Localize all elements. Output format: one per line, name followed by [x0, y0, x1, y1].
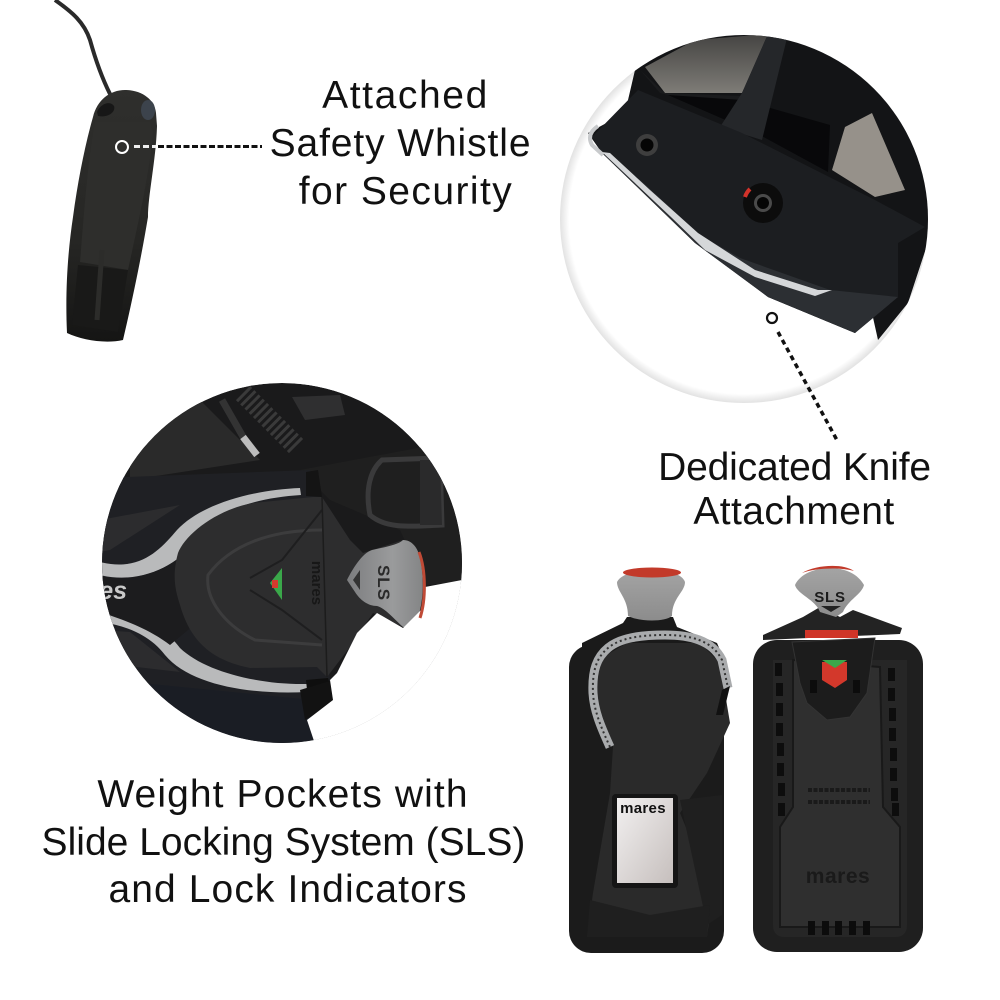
heading: weight pockets: and Lock Indicators	[108, 868, 468, 911]
side slots	[775, 663, 899, 816]
heading: weight pockets: Slide Locking System (SLS)	[42, 821, 525, 864]
dotted leader: knife	[778, 332, 838, 442]
small print	[808, 790, 870, 802]
panel: weight pocket front	[569, 568, 730, 953]
dotted leader: whistle	[134, 145, 262, 148]
panel: weight pocket back	[753, 566, 923, 952]
heading: whistle: Attached	[322, 74, 489, 117]
logo: mares belt: mares	[53, 577, 127, 605]
heading: whistle: for Security	[299, 170, 513, 213]
heading: knife: Dedicated Knife	[658, 446, 931, 489]
marker: whistle	[116, 141, 128, 153]
heading: knife: Attachment	[693, 490, 895, 533]
panel: knife attachment photo	[560, 30, 932, 403]
label: SLS: SLS	[814, 589, 846, 606]
icon: safety whistle	[55, 0, 157, 342]
logo: mares plate: mares	[806, 865, 870, 888]
panel: SLS buckle photo	[102, 383, 462, 743]
logo: mares buckle: mares	[308, 561, 325, 605]
logo: mares label: mares	[620, 800, 666, 817]
lock indicator	[822, 660, 847, 688]
heading: weight pockets: Weight Pockets with	[97, 773, 469, 816]
label: SLS handle: SLS	[374, 565, 393, 601]
lock indicator	[270, 568, 282, 600]
marker: knife	[767, 313, 777, 323]
bottom slots	[808, 921, 870, 935]
heading: whistle: Safety Whistle	[270, 122, 531, 165]
